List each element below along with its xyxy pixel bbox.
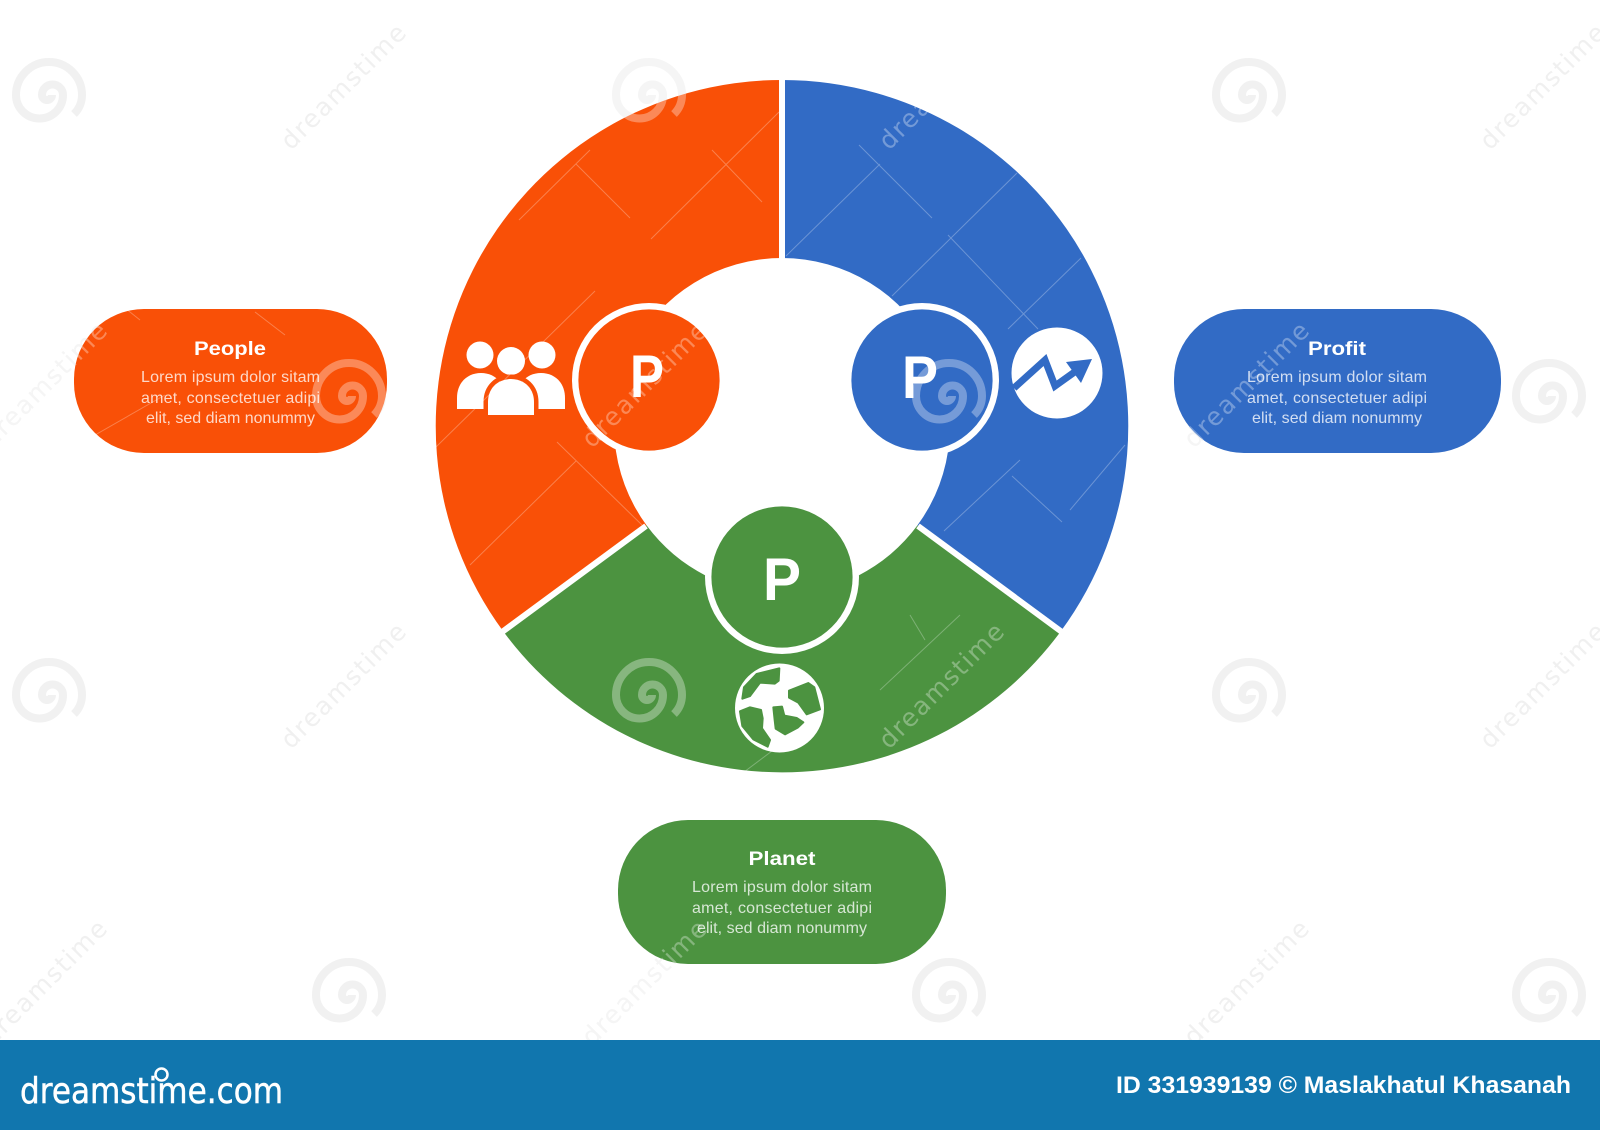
text block: people: Lorem ipsum dolor sitam: [141, 369, 320, 386]
background watermark layer: dreamstime: [576, 914, 713, 1051]
text block: planet: elit, sed diam nonummy: [697, 920, 867, 937]
icon: growth chart: [1012, 328, 1102, 418]
donut chart: [436, 74, 1128, 772]
watermark overlay: dreamstime: [873, 617, 1010, 754]
text block: planet: Lorem ipsum dolor sitam: [692, 879, 872, 896]
text block: people: amet, consectetuer adipi: [141, 390, 320, 407]
text block: profit: elit, sed diam nonummy: [1252, 410, 1422, 427]
circle: planet P: [705, 500, 859, 654]
footer bar: [0, 1040, 1600, 1130]
circle: planet P: P: [763, 546, 801, 613]
segment: planet: [503, 525, 1061, 772]
text block: profit: amet, consectetuer adipi: [1247, 390, 1427, 407]
text block: planet: amet, consectetuer adipi: [692, 900, 872, 917]
heading: people: People: [194, 338, 266, 360]
footer logo: dreamstime.com: [20, 1071, 283, 1112]
text block: profit: [1247, 369, 1427, 427]
text block: people: [141, 369, 320, 427]
icon: people: [457, 342, 565, 415]
text block: profit: Lorem ipsum dolor sitam: [1247, 369, 1427, 386]
circle: profit P: [845, 303, 999, 457]
watermark overlay: [0, 18, 1315, 1051]
segment: profit: [782, 80, 1128, 631]
text block: planet: [692, 879, 872, 937]
background watermark layer: dreamstime: [275, 18, 412, 155]
icon: globe: [735, 664, 824, 752]
watermark overlay: dreamstime: [576, 914, 713, 1051]
watermark overlay: dreamstime: [1178, 316, 1315, 453]
circle: profit P: P: [902, 344, 938, 411]
heading: profit: Profit: [1308, 338, 1367, 360]
separators: [498, 74, 1066, 635]
panel: profit: [1174, 309, 1501, 453]
watermark overlay: dreamstime: [873, 18, 1010, 155]
segment: people: [436, 80, 782, 631]
watermark overlay: dreamstime: [576, 316, 713, 453]
heading: planet: Planet: [748, 848, 816, 870]
background watermark layer: dreamstime: [275, 617, 412, 754]
background watermark layer: dreamstime: [1178, 914, 1315, 1051]
background watermark layer: dreamstime: [1178, 316, 1315, 453]
text block: people: elit, sed diam nonummy: [146, 410, 315, 427]
circle: people P: P: [630, 343, 664, 410]
footer credit: ID 331939139 © Maslakhatul Khasanah: [1116, 1072, 1571, 1099]
circle: people P: [572, 303, 726, 457]
panel: people: [74, 309, 387, 453]
panel: planet: [618, 820, 946, 964]
